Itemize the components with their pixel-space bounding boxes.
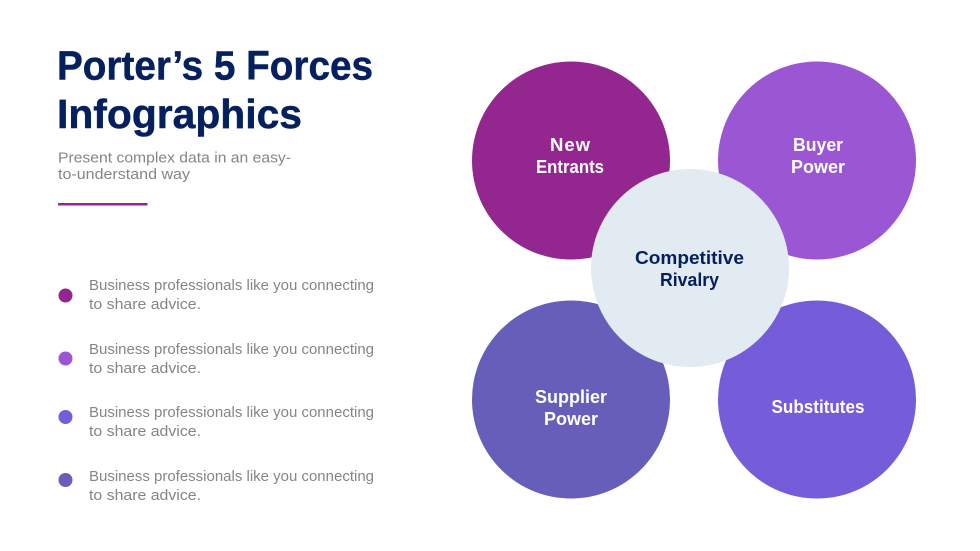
- circle: new entrants: Entrants: [536, 156, 604, 177]
- title: Porter’s 5 Forces: [57, 42, 373, 88]
- subtitle: [58, 150, 291, 183]
- title: [57, 42, 373, 137]
- bullet list: [58, 277, 374, 504]
- circle: new entrants: [472, 62, 670, 260]
- title underline: [58, 203, 148, 206]
- circle: competitive rivalry: Competitive: [635, 247, 744, 268]
- circle: new entrants: New: [550, 134, 591, 155]
- bullet item 4: Business professionals like you connecting: [89, 468, 374, 485]
- subtitle: to-understand way: [58, 166, 191, 183]
- bullet item 4: [58, 468, 374, 504]
- subtitle: Present complex data in an easy-: [58, 150, 291, 166]
- circle: buyer power: Power: [791, 156, 845, 177]
- bullet item 3: to share advice.: [89, 423, 201, 440]
- bullet item 4: to share advice.: [89, 487, 201, 504]
- title: Infographics: [57, 91, 302, 137]
- circle: buyer power: Buyer: [793, 134, 843, 155]
- circle: supplier power: Power: [544, 408, 598, 429]
- circle: supplier power: [472, 300, 670, 498]
- bullet item 1: [58, 277, 374, 313]
- bullet item 3: Business professionals like you connecting: [89, 404, 374, 421]
- circle: competitive rivalry: [591, 169, 789, 367]
- circle: supplier power: Supplier: [535, 386, 607, 407]
- bullet item 1: to share advice.: [89, 296, 201, 313]
- circle: buyer power: [718, 62, 916, 260]
- bullet item 1: Business professionals like you connecting: [89, 277, 374, 294]
- bullet item 3: [58, 404, 374, 440]
- circle: substitutes: Substitutes: [772, 396, 864, 417]
- bullet item 2: Business professionals like you connecting: [89, 341, 374, 358]
- bullet item 2: to share advice.: [89, 360, 201, 377]
- circle: substitutes: [718, 300, 916, 498]
- bullet item 2: [58, 341, 374, 377]
- circle: competitive rivalry: Rivalry: [660, 269, 720, 290]
